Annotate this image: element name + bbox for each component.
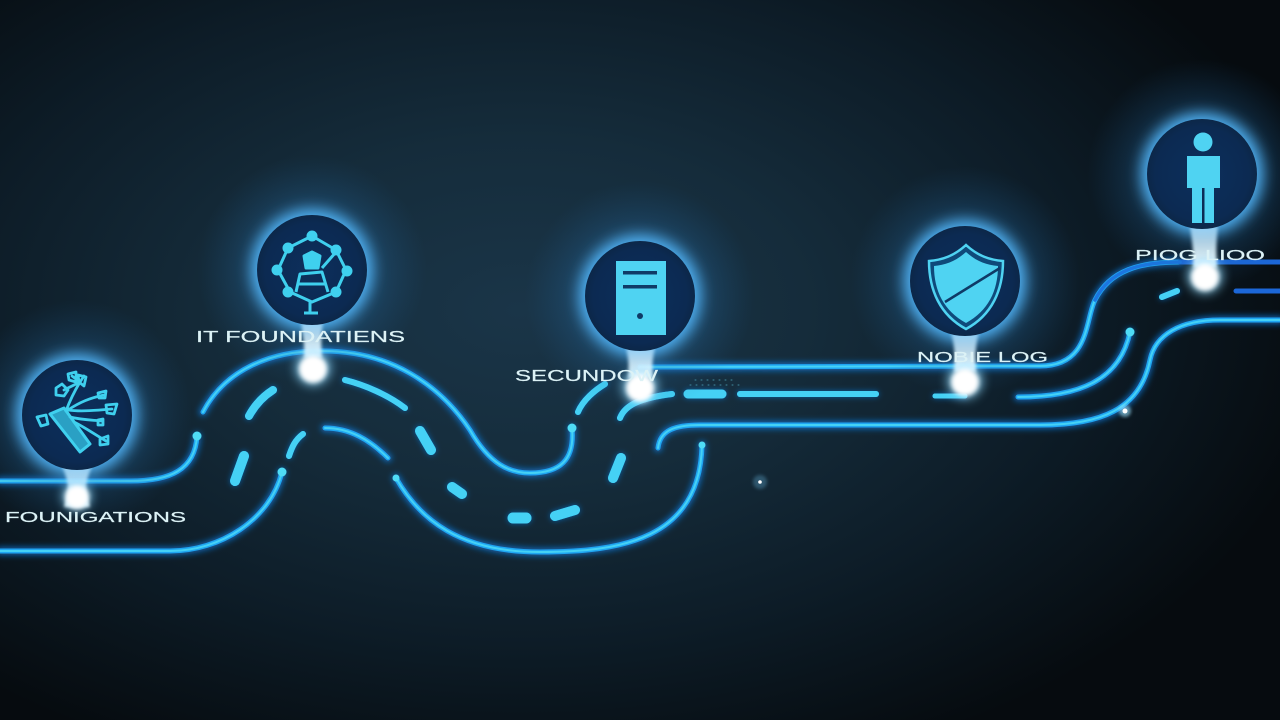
disc (910, 226, 1020, 336)
label: PIOG LIOO (1135, 247, 1265, 264)
node (1187, 258, 1223, 294)
halo (197, 155, 427, 385)
disc (257, 215, 367, 325)
sparkles (753, 405, 1131, 489)
label: SECUNDOW (515, 368, 659, 385)
icon: person (1187, 132, 1220, 223)
icon: shield (929, 245, 1003, 329)
label: IT FOUNDATIENS (196, 329, 405, 346)
disc (22, 360, 132, 470)
connector (1190, 226, 1218, 268)
disc (1147, 119, 1257, 229)
halo (525, 181, 755, 411)
icon: tree (37, 372, 117, 452)
connector (62, 466, 92, 507)
node (295, 350, 331, 386)
halo (0, 300, 192, 530)
node (622, 369, 658, 405)
milestone 4: node log (850, 166, 1080, 399)
node (947, 363, 983, 399)
label: FOUNIGATIONS (5, 509, 186, 526)
label: NOBIE LOG (917, 349, 1048, 366)
connector (301, 322, 323, 358)
halo (850, 166, 1080, 396)
node (62, 481, 92, 511)
icon: network (273, 232, 351, 313)
halo (1087, 59, 1280, 289)
milestone 5: person (1087, 59, 1280, 294)
disc (585, 241, 695, 351)
milestone 2: IT foundations (196, 155, 427, 386)
connector (626, 348, 655, 378)
connector (951, 333, 979, 372)
milestone 1: foundations (0, 300, 192, 530)
milestone 3: secundo (515, 181, 755, 411)
winding road path (0, 262, 1280, 552)
icon: server (616, 261, 666, 335)
